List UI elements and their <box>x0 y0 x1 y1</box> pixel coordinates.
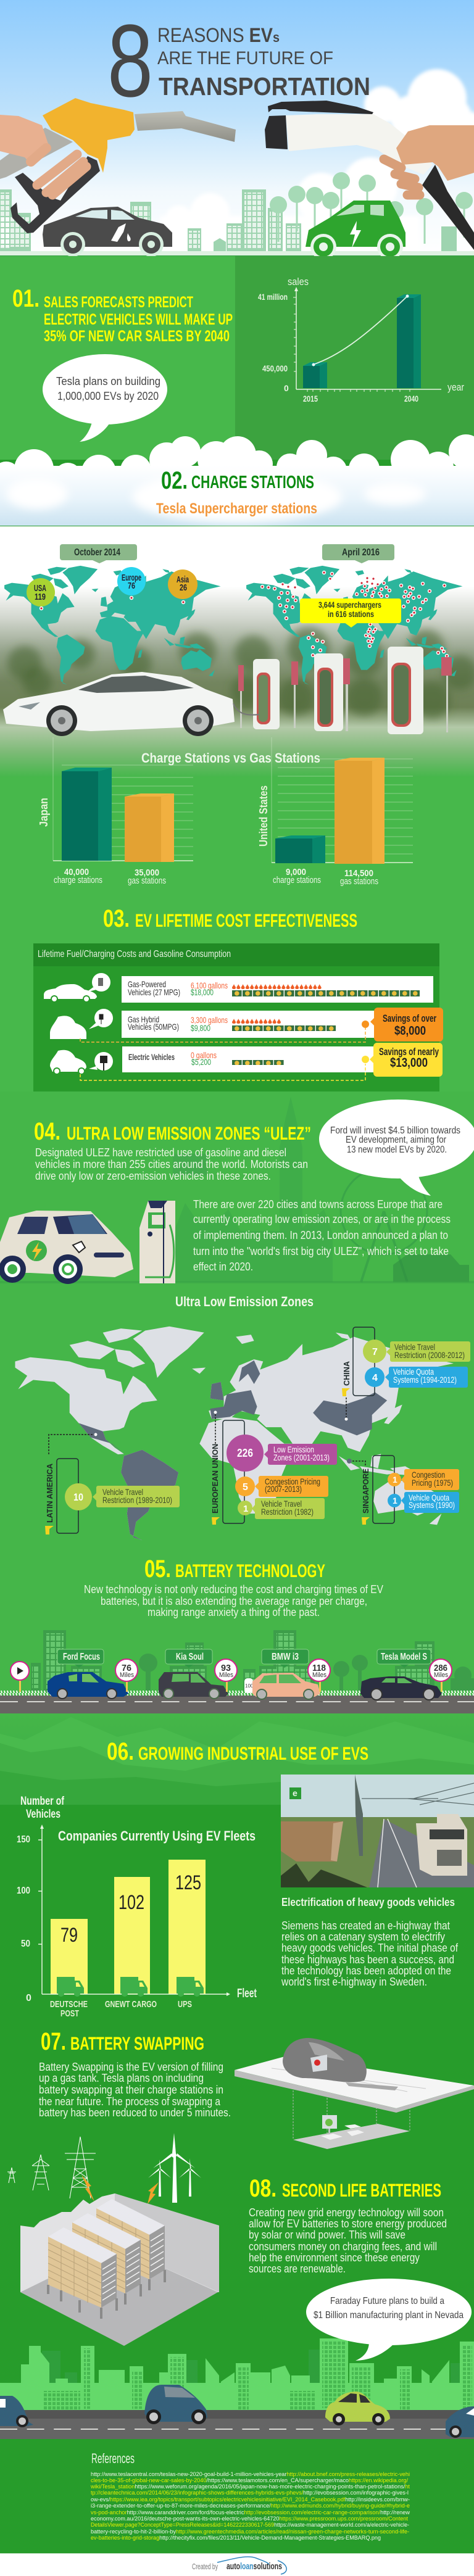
references: vs-pod-anchorhttp://www.caranddriver.com/ford/focus-electric http://evobsession.com/electric-car-range-comparison/ http://renew <box>91 2509 410 2516</box>
region: Singapore <box>361 1456 459 1525</box>
region: European Union: 226 <box>237 1447 253 1459</box>
dashed savings bracket: electric <box>80 1064 365 1080</box>
heading: 08 <box>249 2175 441 2202</box>
bars: United States <box>257 758 385 887</box>
heading: 06: 06. <box>107 1738 134 1765</box>
region: China: Vehicle Travel <box>394 1342 435 1352</box>
heading: 06: GROWING INDUSTRIAL USE OF EVS <box>138 1744 368 1764</box>
bar chart: EV fleets: UPS <box>178 1999 192 2010</box>
map: April 2016: 3,644 superchargers <box>318 600 381 610</box>
bar chart: EV fleets: 125 <box>175 1871 201 1894</box>
photo: e-highway: e <box>293 1788 297 1798</box>
car: Kia Soul: Miles <box>219 1671 233 1679</box>
heading: 03: 03. <box>103 905 130 932</box>
car: blue left <box>0 2396 33 2427</box>
cloud divider with section heading <box>0 434 474 526</box>
icon: EV charging plug and hand <box>265 101 474 250</box>
heading: 04 <box>34 1118 311 1145</box>
row: gas hybrid: $9,800 <box>191 1023 210 1033</box>
panel: section 08 second life batteries <box>7 2133 447 2346</box>
title <box>107 4 370 118</box>
heading: 02: 02. <box>161 467 188 494</box>
heading: 07: 07. <box>41 2028 66 2055</box>
road <box>0 2410 474 2439</box>
bar chart: EV fleets <box>17 1795 257 2019</box>
chart: EV sales 2015 to 2040: 0 <box>284 383 289 393</box>
region: European Union: Congestion Pricing <box>265 1476 320 1486</box>
references: cles-to-be-35-of-global-new-car-sales-by-2040 /https://www.teslamotors.com/en_CA/supercharger/maco https://en.wikipedia.org/ <box>91 2477 408 2483</box>
map: October 2014: 119 <box>35 592 46 602</box>
heading: 03: EV LIFETIME COST EFFECTIVENESS <box>135 911 357 931</box>
map: April 2016: in 616 stations <box>328 609 374 619</box>
region: Singapore: 1 <box>393 1496 397 1505</box>
bar chart: EV fleets: GNEWT CARGO <box>105 1999 157 2010</box>
text block: second life: help the environment since these energy <box>249 2251 420 2264</box>
heading: 01: 01. <box>12 285 40 312</box>
photo: superchargers <box>238 647 452 734</box>
bar chart: EV fleets: DEUTSCHE <box>50 1999 88 2010</box>
map: April 2016 <box>246 544 463 685</box>
panel: section 02 charge stations <box>0 434 474 777</box>
bars: United States: 114,500 <box>344 868 373 879</box>
region: China: Vehicle Quota <box>393 1367 434 1377</box>
heading: 05 <box>144 1555 325 1583</box>
bar chart: EV fleets: Companies Currently Using EV Fleets <box>58 1828 256 1844</box>
car: Kia Soul <box>159 1649 237 1699</box>
region: European Union: Low Emission <box>273 1444 314 1454</box>
car: Kia Soul: Kia Soul <box>176 1652 204 1662</box>
region: Singapore: Systems (1990) <box>409 1500 455 1510</box>
photo: e-highway <box>281 1775 474 1887</box>
map: October 2014: 76 <box>128 581 135 591</box>
car: Kia Soul: 93 <box>221 1663 231 1673</box>
car: BMW i3: 118 <box>312 1663 326 1673</box>
text block: battery swapping: Battery Swapping is the EV version of filling <box>39 2061 223 2073</box>
region: Latin America <box>45 1459 180 1534</box>
heading: 04: 04. <box>34 1118 60 1145</box>
region: Latin America: 10 <box>73 1491 83 1503</box>
region: Singapore: SINGAPORE <box>361 1468 370 1514</box>
region: European Union: EUROPEAN UNION <box>210 1444 220 1514</box>
bar chart: EV fleets: 50 <box>21 1939 30 1949</box>
green city skyline <box>0 172 474 257</box>
heading: 01: SALES FORECASTS PREDICT <box>44 294 193 311</box>
bars: Japan: charge stations <box>54 875 102 885</box>
callout: Faraday Future <box>306 2279 472 2361</box>
region: China: Systems (1994-2012) <box>393 1375 457 1385</box>
bottom city street <box>0 2338 474 2439</box>
road <box>0 1691 474 1713</box>
callout: savings of over $8,000: $8,000 <box>394 1024 426 1038</box>
bars: United States: gas stations <box>340 876 378 887</box>
heading: 02 <box>161 467 314 494</box>
car: BMW i3: BMW i3 <box>272 1652 299 1662</box>
bar chart: EV fleets: 102 <box>118 1891 144 1913</box>
heading: 07 <box>41 2028 204 2055</box>
chart title: Ultra Low Emission Zones: Ultra Low Emission Zones <box>175 1294 314 1309</box>
callout: Ford <box>319 1100 474 1196</box>
heading: 01: 35% OF NEW CAR SALES BY 2040 <box>44 328 230 345</box>
row: gas hybrid: Gas Hybrid <box>128 1014 159 1024</box>
row: gas powered <box>44 973 433 1003</box>
region: Singapore: Congestion <box>412 1470 445 1480</box>
bars: Japan: 40,000 <box>64 867 89 877</box>
region: European Union: 1 <box>243 1504 248 1514</box>
text block: 220 cities: effect in 2020. <box>193 1261 253 1273</box>
references <box>90 2451 410 2541</box>
illustration: battery storage building <box>20 2193 219 2346</box>
text block: second life: by solar or wind power. This will save <box>249 2229 405 2241</box>
bars: Japan: gas stations <box>128 876 166 886</box>
bar chart: EV fleets: POST <box>60 2008 79 2019</box>
region: Latin America: Vehicle Travel <box>102 1487 143 1497</box>
bar chart: EV fleets: Number of <box>20 1795 65 1808</box>
footer: created by <box>0 2553 474 2576</box>
region: China <box>342 1327 470 1396</box>
chart: EV sales 2015 to 2040: 41 million <box>258 292 288 302</box>
panel: section 03 lifetime cost <box>33 905 443 1091</box>
heading: 03 <box>103 905 357 932</box>
map: October 2014: Europe <box>122 573 141 583</box>
text block: battery swapping: battery has been reduced to under 5 minutes. <box>39 2106 231 2119</box>
footer: created by: autoloansolutions <box>227 2561 282 2572</box>
row: gas powered: Vehicles (27 MPG) <box>128 987 180 997</box>
chart title: Charge Stations vs Gas Stations <box>141 750 320 766</box>
text block: second life: Creating new grid energy technology will soon <box>249 2206 444 2219</box>
panel: section 07 battery swapping <box>39 2028 474 2149</box>
text block: second life <box>249 2206 447 2275</box>
photo backdrop: blurred tree line <box>7 627 474 719</box>
map: October 2014 <box>4 544 221 685</box>
callout: Faraday Future: Faraday Future plans to build a <box>330 2296 444 2306</box>
car: Tesla Model S <box>360 1649 452 1700</box>
bars: Japan: Japan <box>38 798 50 827</box>
row: gas powered: 6,100 gallons <box>191 980 228 990</box>
callout: Tesla plans <box>43 354 167 442</box>
panel: charge stations vs gas stations <box>0 737 474 1098</box>
map: October 2014: October 2014 <box>74 547 120 558</box>
road scene skyline <box>31 1630 474 1692</box>
text block: second life: allow for EV batteries to store energy produced <box>249 2218 447 2230</box>
row: electric <box>50 1046 388 1074</box>
row: electric: 0 gallons <box>191 1050 217 1060</box>
references: ow-evs/https://www.iea.org/topics/transport/subtopics/electricvehiclesinitiative/EVI_2014_Casebook.pdfhttp://insideevs.com/bmw- <box>91 2496 410 2503</box>
row: gas hybrid: 3,300 gallons <box>191 1015 228 1025</box>
title: TRANSPORTATION <box>159 72 370 101</box>
text block: designated ULEZ <box>35 1146 308 1182</box>
text block: 220 cities <box>193 1198 451 1273</box>
bars: United States: charge stations <box>273 875 321 885</box>
text block: battery swapping: up a gas tank. Tesla plans on including <box>39 2072 204 2084</box>
text block: second life: consumers money on charging fees, and will <box>249 2240 437 2253</box>
title: REASONS EVs <box>157 24 280 46</box>
car: Tesla Model S: 286 <box>434 1663 447 1673</box>
car: smart blue <box>144 2385 207 2424</box>
text block: new technology <box>84 1583 383 1618</box>
chart: EV sales 2015 to 2040: 2040 <box>404 394 418 404</box>
callout: Tesla plans: 1,000,000 EVs by 2020 <box>57 390 159 402</box>
callout: Tesla plans: Tesla plans on building <box>56 375 160 387</box>
bar chart: EV fleets: 150 <box>17 1834 30 1845</box>
car: Ford Focus: 76 <box>122 1663 131 1673</box>
text block: electrification: Siemens has created an e-highway that <box>281 1920 450 1932</box>
text block: electrification: the technology has been adopted on the <box>281 1965 451 1977</box>
references: i3-range-extender-to-offer-up-to-87-more-miles-decreases-performance/ http://www.edmunds.com/hybrid/buying-guide/#hybrid-e <box>91 2503 410 2509</box>
references: DetailsViewer.page?ConceptType=PressReleases&id=1462222330617-569https://waste-management-world.com/a/electric-vehicle- <box>91 2522 409 2528</box>
references: tp://cleantechnica.com/2014/06/23/infographic-shows-differences-hybrids-evs-phevs/ http://evobsession.com/infographic-gives-l <box>91 2490 409 2496</box>
bars: Japan: 35,000 <box>135 868 159 878</box>
region: European Union: Vehicle Travel <box>261 1499 302 1509</box>
references: References <box>91 2451 135 2466</box>
text block: new technology: New technology is not only reducing the cost and charging times of EV <box>84 1583 383 1596</box>
heading: 05: BATTERY TECHNOLOGY <box>175 1561 325 1581</box>
references: http://www.teslacentral.com/teslas-new-2020-goal-build-1-million-vehicles-year http://about.bnef.com/press-releases/electric-vehi <box>91 2471 410 2477</box>
references: ev-batteries-into-grid-storaghttp://thecityfix.com/files/2013/11/Vehicle-Demand-Management-Strategies-EMBARQ.png <box>91 2535 381 2541</box>
map: October 2014: 26 <box>180 582 187 593</box>
row: gas powered: Gas-Powered <box>128 979 166 989</box>
icon: gas car <box>43 207 172 257</box>
photo: Tesla Model S <box>3 672 259 736</box>
icon: gas pump nozzle and hand <box>0 98 236 233</box>
backdrop: mountain silhouettes <box>0 1717 474 1805</box>
row: gas powered: $18,000 <box>191 987 214 997</box>
region: European Union <box>210 1420 337 1525</box>
icon: power pylons <box>7 2137 96 2198</box>
heading: 04: ULTRA LOW EMISSION ZONES “ULEZ” <box>67 1124 311 1144</box>
callout: Ford: EV development, aiming for <box>346 1135 447 1145</box>
bar chart: EV fleets: 79 <box>60 1924 78 1946</box>
car: Ford Focus: Miles <box>120 1671 134 1679</box>
clouds behind the header <box>160 69 474 256</box>
map: ULEZ regions <box>15 1327 454 1540</box>
region: China: 4 <box>372 1373 378 1383</box>
panel: section 06 industrial use <box>0 1713 474 2019</box>
bar chart: EV fleets: Fleet <box>237 1987 257 2000</box>
subheading: Tesla Supercharger stations: Tesla Supercharger stations <box>156 500 317 517</box>
text block: designated ULEZ: drive only low or zero-emission vehicles in these zones. <box>35 1170 271 1182</box>
region: China: 7 <box>372 1347 378 1357</box>
map: October 2014: USA <box>34 583 46 594</box>
title: 8 <box>107 4 153 118</box>
dashed savings bracket: hybrid <box>80 1028 365 1042</box>
region: Latin America: Restriction (1989-2010) <box>102 1495 172 1505</box>
region: Singapore: Pricing (1975) <box>412 1478 453 1488</box>
chart: EV sales 2015 to 2040: sales <box>288 276 309 288</box>
car: BMW i3: Miles <box>312 1671 326 1679</box>
table: fuel and charging costs <box>33 943 443 1091</box>
text block: new technology: batteries, but it is also extending the average range per charge, <box>101 1595 367 1607</box>
references: economy.com.au/2016/deutsche-post-wants-its-own-electric-vehicles-64720 https://www.pressroom.ups.com/pressroom/Content <box>91 2516 409 2522</box>
header panel: hero illustration and title <box>0 0 474 260</box>
heading: 01: ELECTRIC VEHICLES WILL MAKE UP <box>44 311 233 328</box>
text block: battery swapping <box>39 2061 231 2119</box>
icon: electric car <box>306 201 405 260</box>
references: battery-recycling-to-hit-2-billion-by http://www.greentechmedia.com/articles/read/nissan-green-charge-networks-turn-second-life- <box>91 2528 409 2535</box>
diagram: battery swap platform <box>235 2038 474 2149</box>
text block: battery swapping: battery swapping at their charge stations in <box>39 2084 223 2096</box>
car: Ford Focus <box>48 1649 138 1699</box>
city skyline <box>0 2338 474 2410</box>
heading: 07: BATTERY SWAPPING <box>70 2034 204 2054</box>
map: October 2014: Asia <box>177 574 189 585</box>
table: fuel and charging costs: Lifetime Fuel/Charging Costs and Gasoline Consumption <box>38 949 231 959</box>
text block: electrification <box>281 1896 459 1988</box>
text block: designated ULEZ: vehicles in more than 255 cities around the world. Motorists can <box>35 1158 308 1170</box>
bar chart: EV fleets: 0 <box>26 1993 31 2003</box>
sign: start marker <box>10 1662 29 1692</box>
callout: savings of nearly $13,000: $13,000 <box>390 1056 428 1070</box>
text block: electrification: world's first e-highway in Sweden. <box>281 1976 427 1988</box>
car: Tesla Model S: Tesla Model S <box>381 1652 427 1662</box>
bars: Japan <box>38 768 174 886</box>
panel: section 01 sales forecast <box>0 256 474 460</box>
bars: United States: United States <box>257 785 270 847</box>
heading: 05: 05. <box>144 1555 171 1583</box>
row: gas hybrid <box>50 1009 393 1039</box>
backdrop: faded London skyline <box>0 1097 474 1283</box>
bar chart: EV fleets: Vehicles <box>26 1808 60 1821</box>
footer: created by: Created by <box>192 2562 218 2571</box>
text block: new technology: making range anxiety a thing of the past. <box>148 1606 320 1618</box>
heading: 06 <box>107 1738 368 1765</box>
car: blue right <box>446 2406 474 2438</box>
chart: EV sales 2015 to 2040: 450,000 <box>262 363 288 373</box>
icon: charging post <box>139 1201 175 1283</box>
region: Singapore: Vehicle Quota <box>409 1493 449 1502</box>
row: gas hybrid: Vehicles (50MPG) <box>128 1022 179 1032</box>
car: yellow green <box>325 2392 390 2425</box>
chart: EV sales 2015 to 2040: year <box>447 381 464 393</box>
car: BMW i3 <box>244 1649 330 1699</box>
region: China: CHINA <box>342 1360 351 1386</box>
callout: savings of over $8,000: Savings of over <box>383 1013 436 1024</box>
panel: section 04 ULEZ <box>0 1091 474 1573</box>
map: April 2016: April 2016 <box>342 547 380 558</box>
car: Ford Focus: Ford Focus <box>63 1652 100 1662</box>
bars: United States: 9,000 <box>286 867 306 877</box>
heading: 02: CHARGE STATIONS <box>191 473 314 492</box>
text block: battery swapping: the near future. The process of swapping a <box>39 2095 221 2108</box>
row: electric: Electric Vehicles <box>128 1052 175 1062</box>
callout: Ford: 13 new model EVs by 2020. <box>347 1145 447 1155</box>
text block: electrification: relies on a catenary system to electrify <box>281 1931 445 1943</box>
title: ARE THE FUTURE OF <box>157 48 333 68</box>
callout: savings of nearly $13,000 <box>362 1043 443 1077</box>
heading: 01 <box>12 285 233 345</box>
region: Singapore: 1 <box>393 1475 397 1485</box>
panel: section 05 battery technology <box>0 1555 474 1715</box>
callout: savings of nearly $13,000: Savings of nearly <box>379 1046 439 1058</box>
text block: designated ULEZ: Designated ULEZ have restricted use of gasoline and diesel <box>35 1146 286 1159</box>
car: Tesla Model S: Miles <box>434 1671 448 1679</box>
region: European Union: Zones (2001-2013) <box>273 1452 330 1462</box>
heading: 08: 08. <box>249 2175 276 2202</box>
region: European Union: (2007-2013) <box>265 1484 302 1494</box>
row: electric: $5,200 <box>191 1057 211 1067</box>
chart: EV sales 2015 to 2040 <box>258 276 464 404</box>
icon: wind turbines <box>148 2133 201 2203</box>
icon: white city EV <box>0 1211 133 1284</box>
references: wiki/Tesla_stationhttps://www.weforum.org/agenda/2016/05/japan-now-has-more-electric-charging-points-than-petrol-stations/ ht <box>90 2483 410 2490</box>
callout: savings of over $8,000 <box>362 1008 443 1042</box>
text block: second life: sources are renewable. <box>249 2263 346 2275</box>
region: European Union: 5 <box>243 1482 248 1493</box>
chart: EV sales 2015 to 2040: 2015 <box>303 394 318 404</box>
region: Latin America: LATIN AMERICA <box>45 1463 54 1523</box>
region: European Union: Restriction (1982) <box>261 1507 314 1517</box>
car: BMW i3: 100 <box>245 1683 254 1689</box>
bar chart: EV fleets: 100 <box>17 1886 30 1896</box>
icon: lightning bolts <box>81 2175 159 2204</box>
